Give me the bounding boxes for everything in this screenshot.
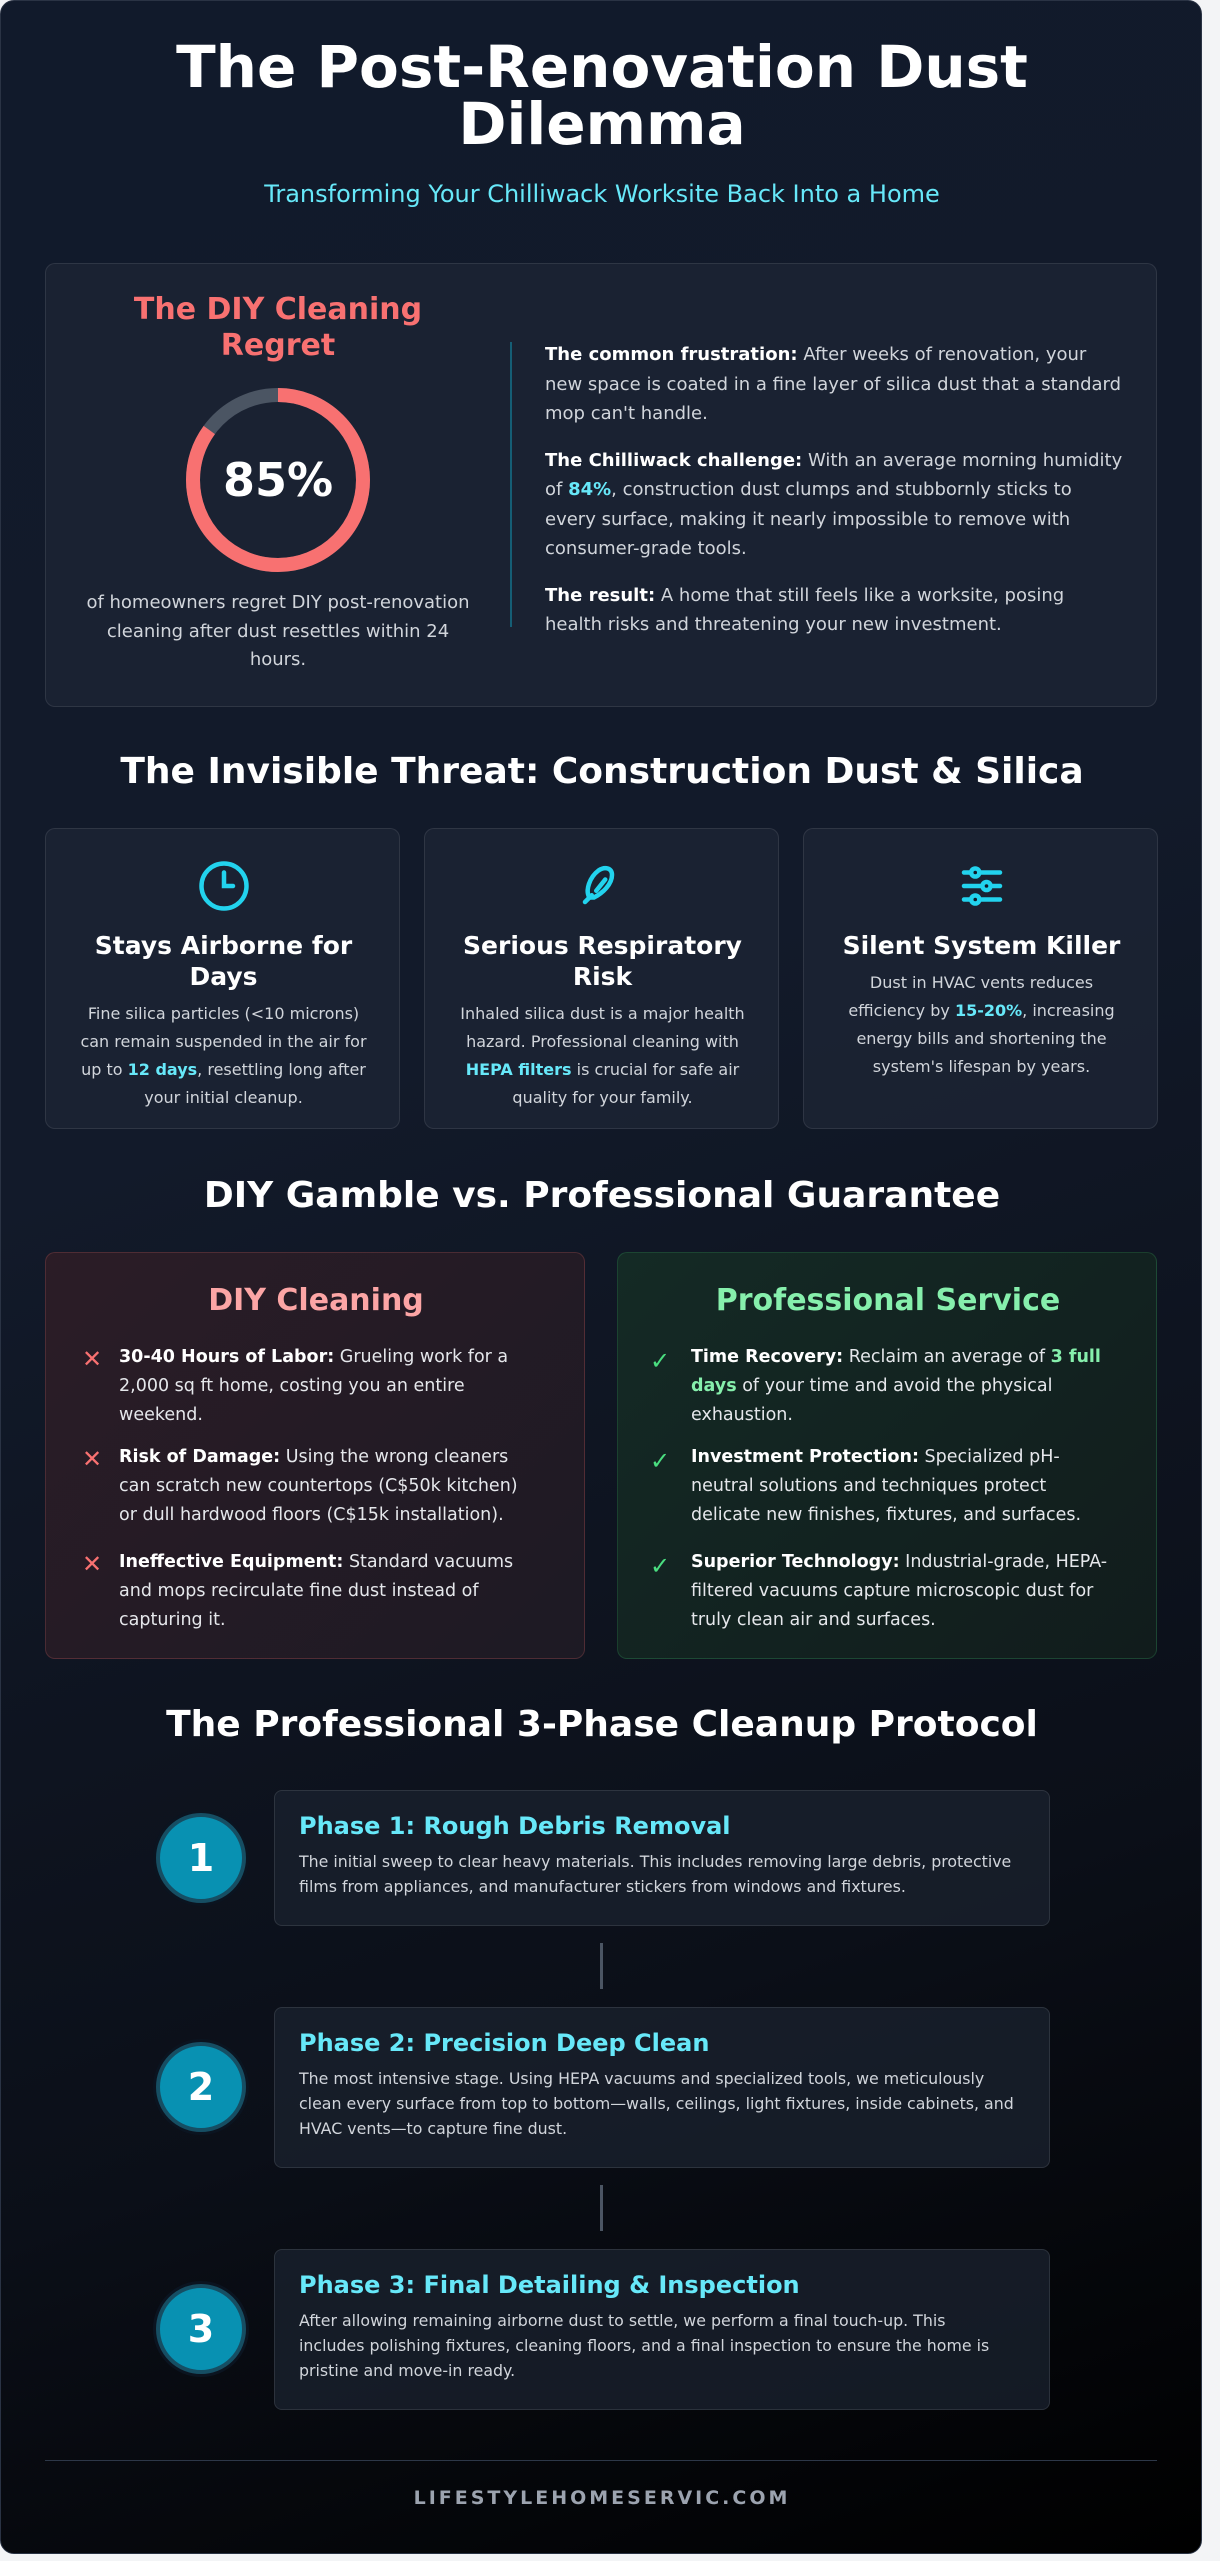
circle 1 (156, 1813, 246, 1903)
challenge text: The common frustration: After weeks of renovation, your new space is coated in a fine layer of silica dust that a standard mop can't handle. (545, 344, 1121, 424)
regret heading (134, 292, 422, 363)
pro items: ✓ (650, 1552, 670, 1580)
card: system killer: Silent System Killer (843, 931, 1120, 960)
card: respiratory (424, 828, 779, 1129)
DIY items: ✕ (82, 1550, 102, 1578)
DIY items: ✕ (82, 1445, 102, 1473)
phase 3 box: Phase 3: Final Detailing & Inspection (299, 2271, 800, 2299)
title: The Post-Renovation Dust (176, 33, 1028, 101)
card: system killer (803, 828, 1158, 1129)
heading: protocol: The Professional 3-Phase Cleanup Protocol (166, 1704, 1038, 1745)
pro items: ✓ (650, 1347, 670, 1375)
title (176, 33, 1028, 158)
phase 1 box (274, 1790, 1050, 1926)
DIY heading: DIY Cleaning (208, 1283, 424, 1318)
regret heading: The DIY Cleaning (134, 292, 422, 327)
pro items: Superior Technology: Industrial-grade, HEPA-filtered vacuums capture microscopic dust for truly clean air and surfaces. (691, 1552, 1107, 1630)
panel: DIY regret (45, 263, 1157, 707)
challenge text: The result: A home that still feels like a worksite, posing health risks and threatening your new investment. (545, 584, 1064, 635)
step 1 (156, 1790, 1050, 1926)
heading: invisible threat: The Invisible Threat: Construction Dust & Silica (120, 751, 1084, 792)
challenge text (545, 344, 1122, 635)
DIY items: 30-40 Hours of Labor: Grueling work for a 2,000 sq ft home, costing you an entire weekend. (119, 1347, 508, 1425)
icon: lungs (582, 866, 614, 904)
donut chart 85%: 85% (223, 453, 333, 507)
phase 1 box: Phase 1: Rough Debris Removal (299, 1812, 731, 1840)
DIY items: ✕ (82, 1345, 102, 1373)
subtitle: Transforming Your Chilliwack Worksite Back Into a Home (264, 180, 940, 208)
pro items: Investment Protection: Specialized pH-neutral solutions and techniques protect delicate new finishes, fixtures, and surfaces. (691, 1447, 1081, 1525)
circle 2: 2 (188, 2065, 214, 2109)
icon: clock (199, 861, 249, 911)
circle 3 (156, 2284, 246, 2374)
pro heading: Professional Service (716, 1283, 1060, 1318)
step 3 (153, 2249, 1050, 2410)
phase 3 box (274, 2249, 1050, 2410)
panel: professional service (617, 1252, 1157, 1659)
card: system killer: Dust in HVAC vents reduces efficiency by 15-20%, increasing energy bills and shortening the system's lifespan by years. (848, 973, 1115, 1076)
title: Dilemma (458, 90, 746, 158)
icon: sliders (962, 866, 1002, 906)
card: respiratory: Inhaled silica dust is a major health hazard. Professional cleaning with HEPA filters is crucial for safe air quality for your family. (460, 1004, 745, 1107)
regret caption: of homeowners regret DIY post-renovation cleaning after dust resettles within 24 hours. (86, 592, 470, 670)
pro items (650, 1347, 1107, 1630)
panel: DIY cleaning (45, 1252, 585, 1659)
card: airborne: Fine silica particles (<10 microns) can remain suspended in the air for up to 12 days, resettling long after your initial cleanup. (80, 1004, 367, 1107)
card: airborne: Stays Airborne for Days (95, 931, 352, 991)
footer: LIFESTYLEHOMESERVIC.COM (414, 2487, 790, 2509)
phase 2 box: The most intensive stage. Using HEPA vacuums and specialized tools, we meticulously clean every surface from top to bottom—walls, ceilings, light fixtures, inside cabinets, and HVAC vents—to capture fine dust. (299, 2069, 1014, 2138)
circle 2 (156, 2042, 246, 2132)
card: respiratory: Serious Respiratory Risk (463, 931, 742, 991)
DIY items: Risk of Damage: Using the wrong cleaners can scratch new countertops (C$50k kitchen) or dull hardwood floors (C$15k installation). (119, 1447, 518, 1525)
donut chart 85% (186, 388, 370, 572)
phase 2 box: Phase 2: Precision Deep Clean (299, 2029, 709, 2057)
phase 3 box: After allowing remaining airborne dust to settle, we perform a final touch-up. This includes polishing fixtures, cleaning floors, and a final inspection to ensure the home is pristine and move-in ready. (299, 2311, 989, 2380)
phase 2 box (274, 2007, 1050, 2168)
DIY items: Ineffective Equipment: Standard vacuums and mops recirculate fine dust instead of capturing it. (119, 1552, 513, 1630)
step 2 (156, 2007, 1050, 2168)
DIY items (82, 1345, 518, 1630)
card: airborne (45, 828, 400, 1129)
divider (510, 342, 512, 627)
regret heading: Regret (221, 328, 335, 363)
pro items: Time Recovery: Reclaim an average of 3 full days of your time and avoid the physical exhaustion. (691, 1347, 1101, 1425)
heading: comparison: DIY Gamble vs. Professional Guarantee (204, 1175, 1000, 1216)
circle 1: 1 (188, 1836, 214, 1880)
challenge text: The Chilliwack challenge: With an average morning humidity of 84%, construction dust clumps and stubbornly sticks to every surface, making it nearly impossible to remove with consumer-grade tools. (545, 450, 1122, 559)
pro items: ✓ (650, 1447, 670, 1475)
circle 3: 3 (188, 2307, 214, 2351)
phase 1 box: The initial sweep to clear heavy materials. This includes removing large debris, protective films from appliances, and manufacturer stickers from windows and fixtures. (299, 1852, 1011, 1896)
